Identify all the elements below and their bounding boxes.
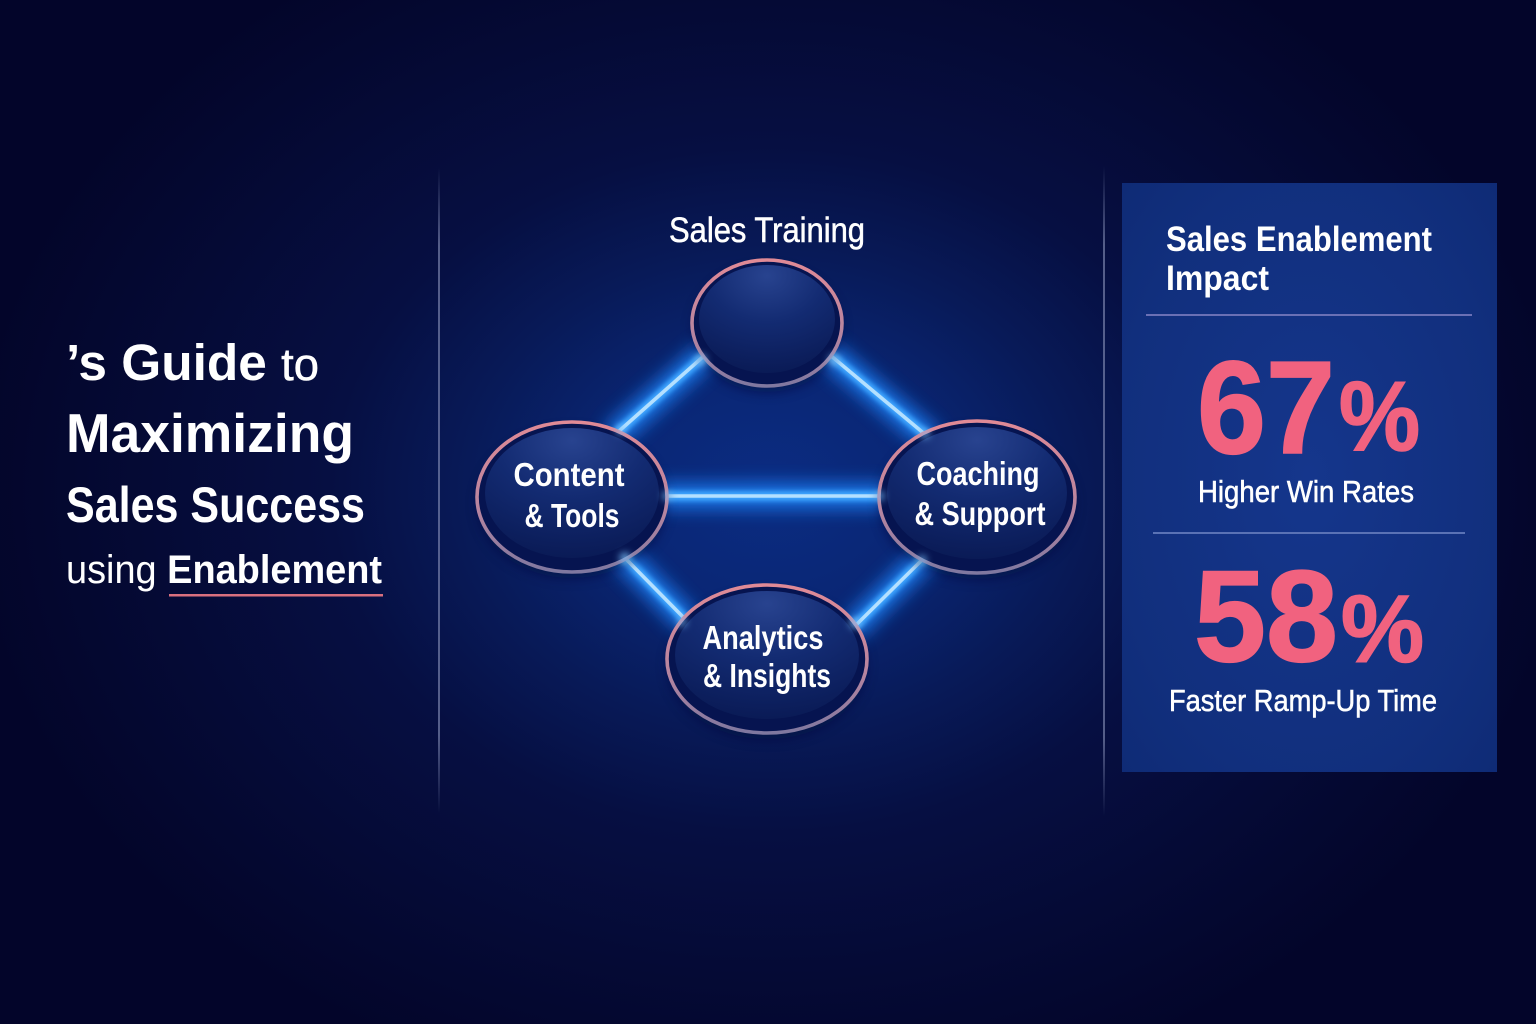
node: content and tools: Content [514, 456, 625, 493]
node: coaching and support [879, 421, 1075, 579]
right divider [1103, 166, 1105, 816]
node: analytics and insights: & Insights [703, 657, 831, 694]
heading: sales training: Sales Training [669, 211, 865, 250]
node: analytics and insights [667, 585, 867, 739]
node: content and tools [477, 422, 667, 578]
title: using Enablement [66, 548, 382, 592]
node: content and tools: & Tools [524, 497, 620, 534]
stat: 58 percent: 58 [1194, 543, 1338, 689]
panel heading [1166, 220, 1432, 298]
stat: 67 percent: 67 [1197, 334, 1335, 481]
panel heading: Impact [1166, 259, 1269, 298]
title: Sales Success [66, 477, 365, 533]
stat: 58 percent: % [1341, 576, 1424, 683]
node: analytics and insights: Analytics [702, 619, 824, 656]
title underline [169, 594, 383, 596]
connector glints [617, 355, 929, 628]
stat: 67 percent: % [1339, 361, 1420, 471]
panel: sales enablement impact [1122, 183, 1497, 772]
title: Maximizing [66, 402, 354, 464]
stat: 58 percent [1169, 543, 1437, 718]
node: coaching and support: & Support [914, 495, 1046, 532]
node: coaching and support: Coaching [916, 455, 1040, 492]
title: ’s Guide to [66, 334, 319, 391]
stat: 67 percent: Higher Win Rates [1198, 474, 1414, 509]
left divider [438, 168, 440, 813]
network connectors [618, 355, 927, 626]
stat: 67 percent [1197, 334, 1420, 509]
panel heading: Sales Enablement [1166, 220, 1432, 259]
title [66, 334, 383, 596]
stat: 58 percent: Faster Ramp-Up Time [1169, 683, 1437, 718]
node: sales training [692, 260, 842, 392]
